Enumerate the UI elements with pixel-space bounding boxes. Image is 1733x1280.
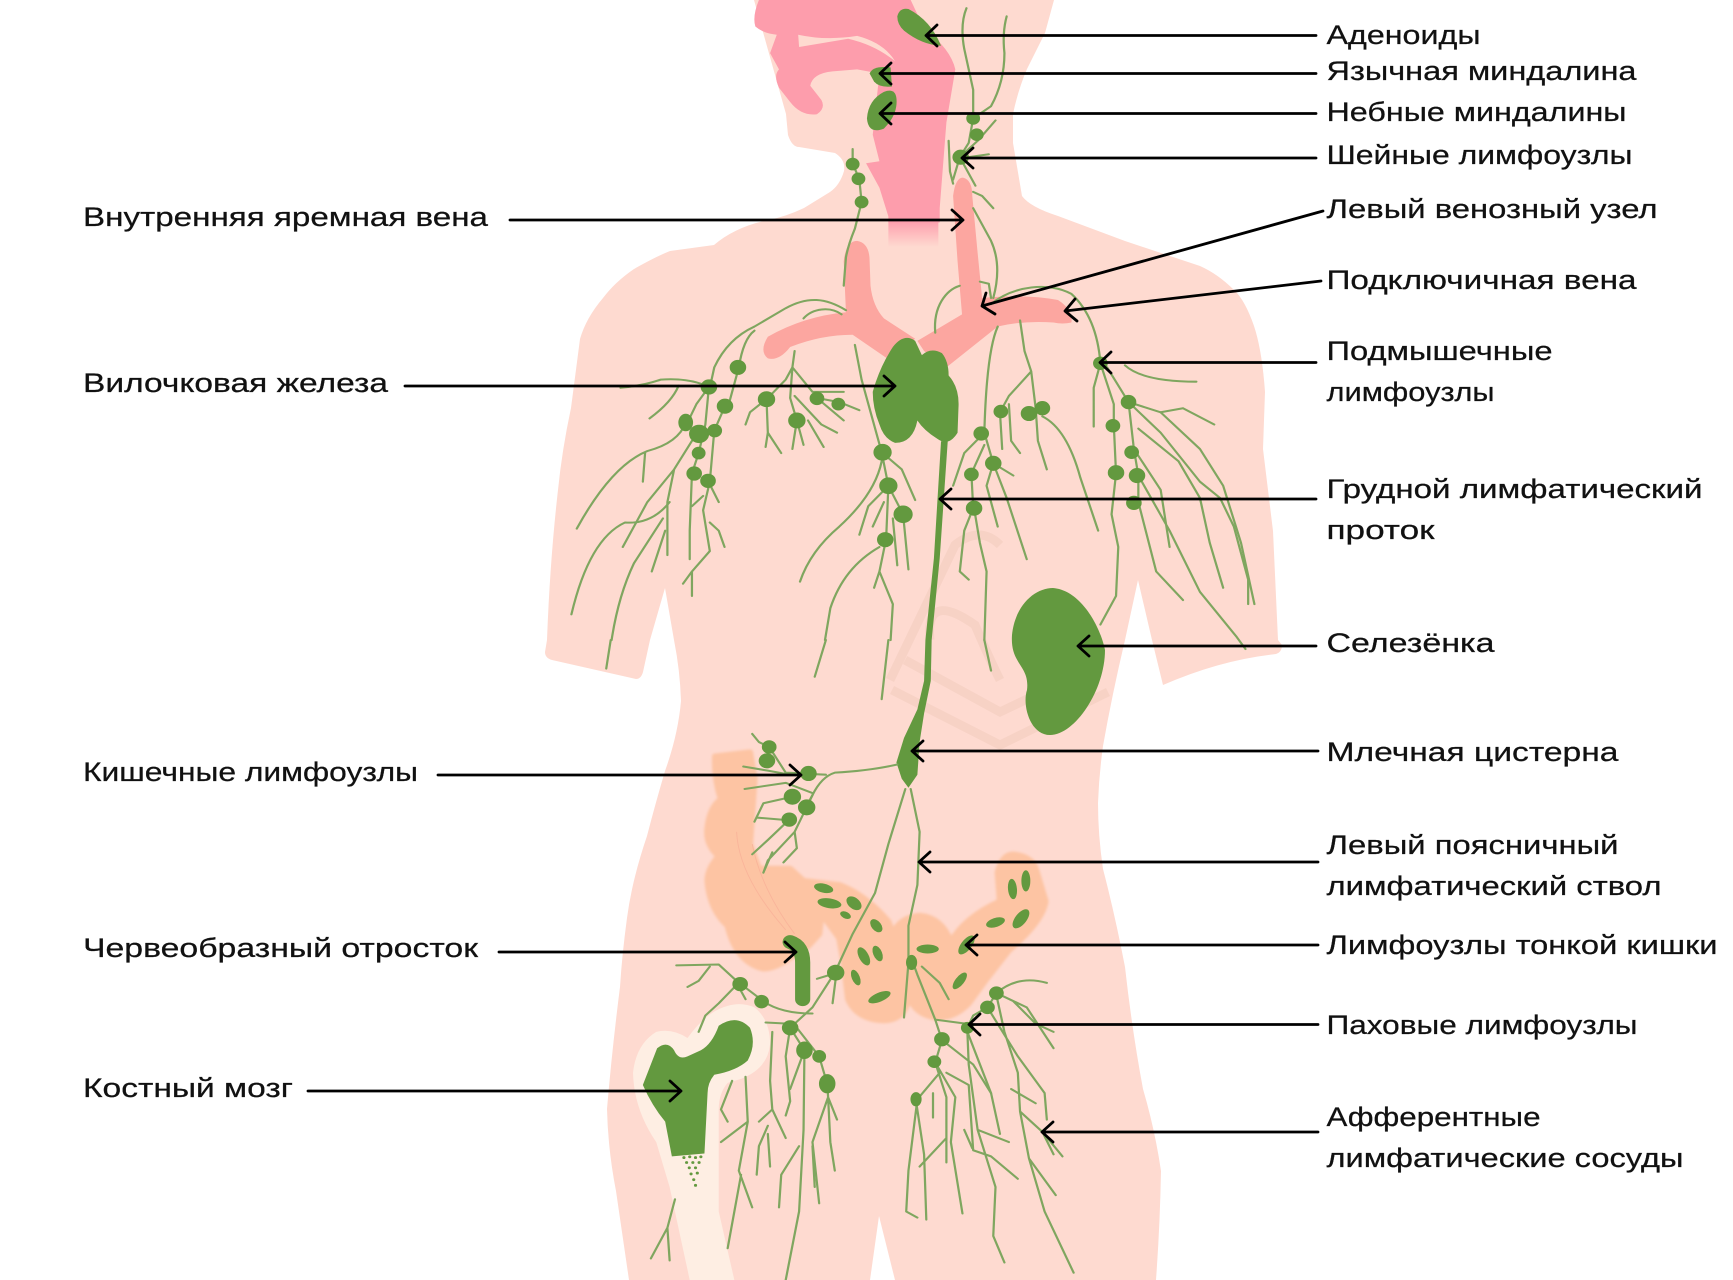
lingual tonsil	[870, 67, 892, 87]
label: axillary nodes: лимфоузлы	[1326, 377, 1494, 407]
label: cisterna chyli: Млечная цистерна	[1326, 737, 1620, 767]
label: thoracic duct: Грудной лимфатический	[1326, 474, 1702, 504]
arrow: appendix	[499, 942, 796, 962]
label: inguinal nodes: Паховые лимфоузлы	[1326, 1010, 1638, 1040]
lower lymph nodes	[733, 741, 1003, 1106]
thoracic duct and cisterna	[896, 441, 948, 788]
label: afferent vessels: лимфатические сосуды	[1326, 1143, 1684, 1173]
upper lymph vessels	[571, 8, 1254, 649]
label: intestinal nodes: Кишечные лимфоузлы	[83, 757, 418, 787]
arrow: afferent vessels	[1042, 1122, 1318, 1142]
arrow: adenoids	[926, 25, 1316, 46]
label: thoracic duct: проток	[1326, 515, 1435, 545]
arrow: cervical nodes	[962, 148, 1316, 168]
arrow: left venous angle	[982, 211, 1323, 314]
label: spleen: Селезёнка	[1326, 628, 1496, 658]
femur bone	[633, 1004, 770, 1280]
airway and nasal cavity	[754, 0, 955, 247]
label: afferent vessels: Афферентные	[1326, 1102, 1540, 1132]
bone marrow	[643, 1020, 753, 1187]
label: appendix: Червеобразный отросток	[83, 933, 478, 963]
palatine tonsils	[867, 91, 897, 130]
arrow: jugular vein	[510, 210, 963, 230]
label: axillary nodes: Подмышечные	[1326, 336, 1552, 366]
arrow: axillary nodes	[1100, 352, 1316, 373]
label: subclavian vein: Подключичная вена	[1326, 265, 1638, 295]
arrow: left lumbar trunk	[919, 852, 1318, 872]
label: palatine tonsils: Небные миндалины	[1326, 97, 1626, 127]
small intestine lymph nodes	[813, 870, 1033, 1006]
thymus	[873, 338, 959, 443]
subclavian and jugular veins	[763, 178, 1072, 367]
human body silhouette	[545, 0, 1282, 1280]
label: cervical nodes: Шейные лимфоузлы	[1326, 140, 1632, 170]
label: afferent vessels	[1326, 1102, 1684, 1173]
label: small intestine nodes: Лимфоузлы тонкой кишки	[1326, 930, 1718, 960]
arrow: spleen	[1078, 636, 1316, 656]
label: lingual tonsil: Язычная миндалина	[1326, 56, 1638, 86]
label: jugular vein: Внутренняя яремная вена	[83, 202, 489, 232]
label: thymus: Вилочковая железа	[83, 368, 389, 398]
arrow: palatine tonsils	[880, 103, 1316, 124]
label: adenoids: Аденоиды	[1326, 20, 1480, 50]
arrow: small intestine nodes	[966, 935, 1318, 955]
arrow: thoracic duct	[940, 489, 1316, 509]
label: axillary nodes	[1326, 336, 1552, 407]
upper lymph nodes	[679, 113, 1145, 547]
arrow: subclavian vein	[1065, 281, 1321, 321]
lower lymph vessels	[606, 640, 1074, 1280]
appendix	[790, 942, 803, 999]
colon	[707, 752, 1046, 1020]
label: bone marrow: Костный мозг	[83, 1073, 293, 1103]
adenoids	[897, 9, 941, 46]
arrow: lingual tonsil	[880, 63, 1316, 84]
label: left lumbar trunk	[1326, 830, 1662, 901]
arrow: intestinal nodes	[438, 765, 801, 785]
spleen	[1012, 588, 1105, 735]
arrow: cisterna chyli	[912, 741, 1318, 761]
arrow: inguinal nodes	[969, 1014, 1318, 1035]
arrow: bone marrow	[308, 1081, 681, 1101]
label: left lumbar trunk: Левый поясничный	[1326, 830, 1618, 860]
label: thoracic duct	[1326, 474, 1702, 545]
label: left venous angle: Левый венозный узел	[1326, 194, 1658, 224]
faint watermark logo	[890, 535, 1108, 745]
label: left lumbar trunk: лимфатический ствол	[1326, 871, 1662, 901]
arrow: thymus	[405, 376, 895, 396]
